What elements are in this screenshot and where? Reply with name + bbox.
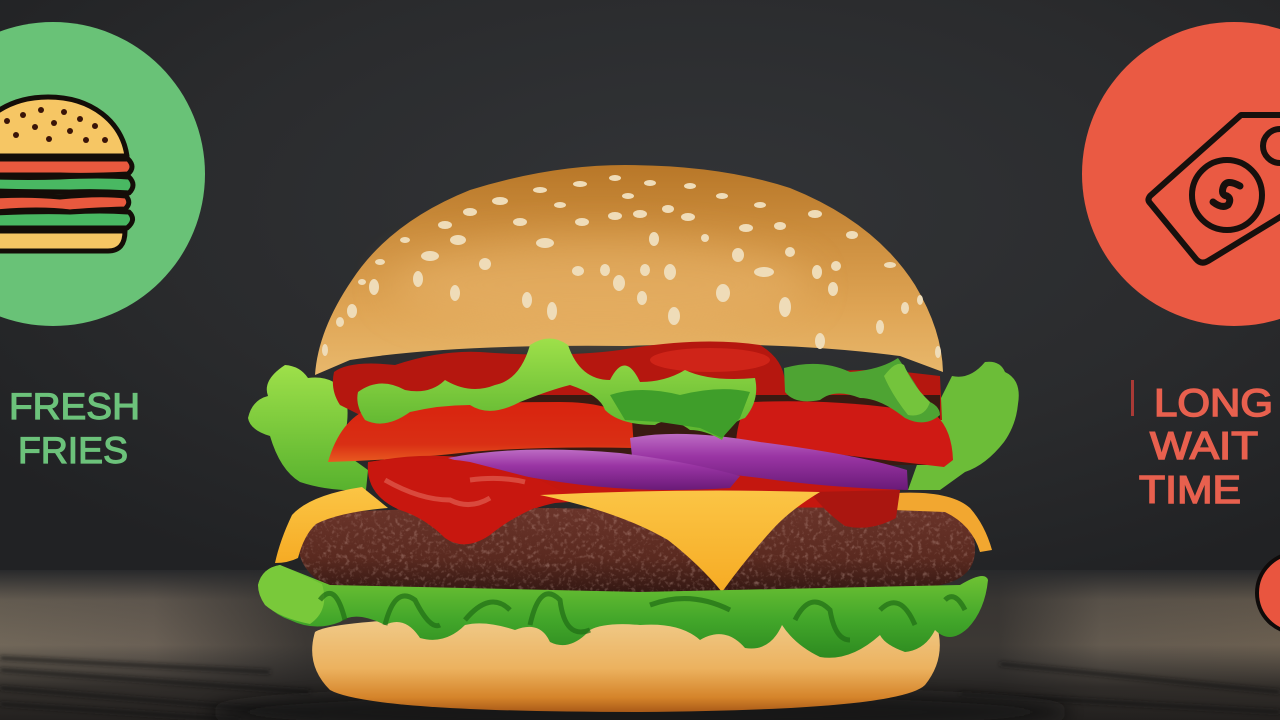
onion right [630, 434, 908, 490]
accent bar [1131, 380, 1134, 416]
label: long wait time: LONG [1154, 382, 1273, 425]
cheese centre [540, 491, 820, 592]
red circle with price tag icon [1082, 22, 1280, 326]
top lettuce right light edge [884, 364, 930, 415]
ketchup drip over patty [368, 458, 570, 544]
sesame seeds [322, 175, 941, 358]
label: long wait time: TIME [1139, 469, 1241, 512]
small red circle, right edge [1257, 553, 1280, 633]
bottom lettuce [258, 565, 988, 658]
bottom lettuce light left [258, 565, 324, 624]
icon: dollar tag [1148, 115, 1280, 263]
bun highlight [390, 240, 810, 330]
label: fresh fries [9, 386, 140, 471]
back lettuce left [248, 365, 368, 490]
ketchup highlight [650, 348, 770, 372]
back tomato shadow [370, 395, 940, 465]
label: long wait time: WAIT [1150, 425, 1258, 468]
upper ketchup [333, 341, 942, 420]
label: fresh fries: FRESH [9, 386, 140, 427]
tomato right [736, 401, 953, 467]
icon: bun sesame dots [4, 107, 108, 143]
top lettuce [357, 338, 756, 440]
top bun [315, 165, 943, 375]
wooden table [0, 570, 1280, 720]
ketchup highlights [385, 478, 525, 505]
ketchup drip right [810, 490, 900, 528]
label: long wait time [1139, 382, 1273, 512]
burger illustration [248, 165, 1019, 712]
back lettuce right [908, 362, 1019, 490]
top lettuce dark fold [610, 389, 750, 438]
label: fresh fries: FRIES [18, 430, 128, 471]
cheese left strip [275, 487, 388, 563]
top lettuce right [784, 358, 940, 422]
lettuce folds [320, 593, 965, 640]
onion left [448, 449, 740, 490]
cheese right strip [893, 493, 992, 552]
green circle with burger icon [0, 22, 205, 326]
tomato left [328, 402, 634, 462]
icon: burger [0, 97, 133, 251]
patty [298, 508, 975, 599]
lower ketchup [369, 456, 900, 542]
bottom bun [312, 615, 940, 712]
